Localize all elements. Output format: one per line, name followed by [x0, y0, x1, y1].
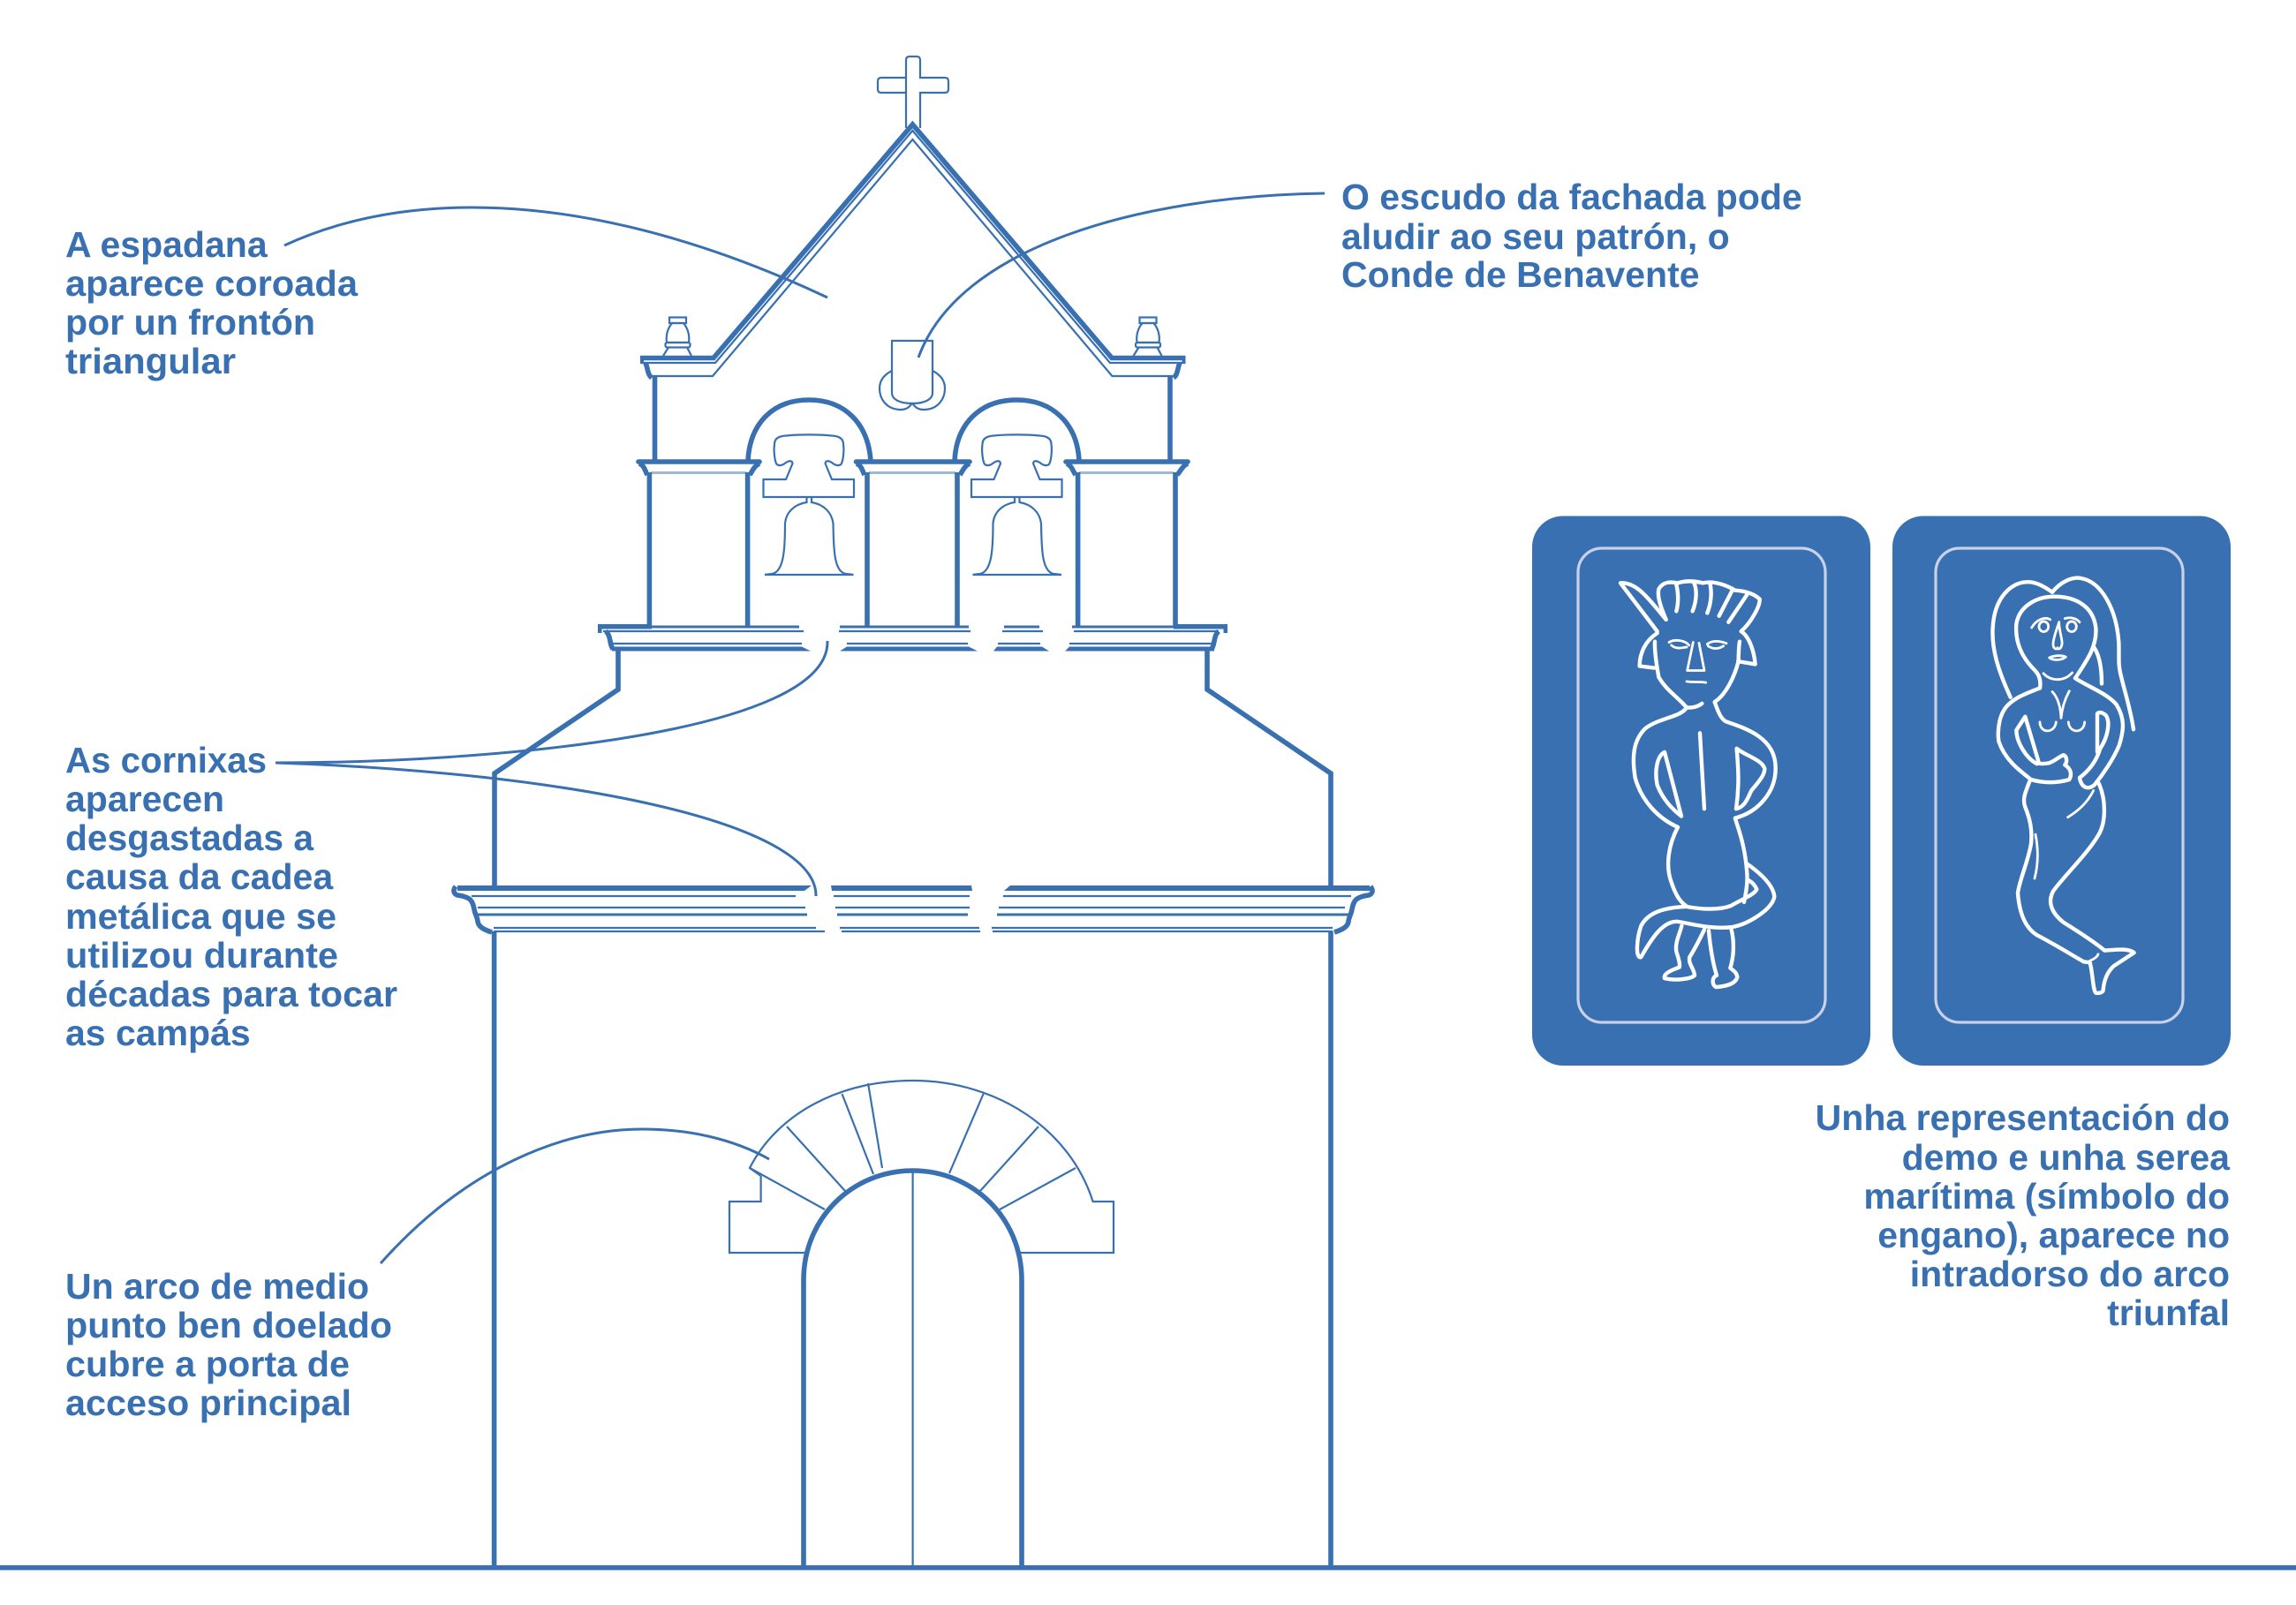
- text: carvings caption: [1816, 1097, 2231, 1333]
- text: gable annotation: A espadana: [65, 224, 268, 265]
- main worn cornice: [454, 885, 1372, 932]
- ground line: [0, 1565, 2296, 1570]
- text: coat of arms annotation: aludir ao seu patrón, o: [1341, 216, 1730, 257]
- text: coat of arms annotation: Conde de Benavente: [1341, 254, 1700, 295]
- icon: left finial urn: [663, 318, 691, 356]
- text: coat of arms annotation: O escudo da fachada pode: [1341, 177, 1802, 217]
- text: gable annotation: [65, 224, 359, 381]
- text: door arch annotation: Un arco de medio: [65, 1266, 369, 1307]
- text: cornice annotation: As cornixas: [65, 740, 267, 780]
- triangular pediment: [640, 124, 1185, 378]
- icon: mermaid figure: [1992, 578, 2134, 993]
- icon: right finial urn: [1134, 318, 1162, 356]
- text: carvings caption: marítima (símbolo do: [1863, 1176, 2230, 1217]
- icon: coat of arms shield: [880, 341, 945, 410]
- text: carvings caption: Unha representación do: [1816, 1097, 2230, 1138]
- pilaster capitals: [638, 462, 1188, 475]
- text: cornice annotation: as campás: [65, 1013, 251, 1053]
- voussoirs of the semicircular arch: [729, 1081, 1114, 1253]
- belfry pilasters: [649, 472, 1175, 626]
- text: gable annotation: aparece coroada: [65, 263, 359, 304]
- upper worn cornice: [598, 624, 1227, 652]
- text: cornice annotation: aparecen: [65, 779, 224, 819]
- text: gable annotation: triangular: [65, 341, 236, 381]
- text: cornice annotation: [65, 740, 397, 1053]
- text: carvings caption: intradorso do arco: [1910, 1254, 2230, 1294]
- main door arch: [804, 1171, 1022, 1568]
- text: carvings caption: demo e unha serea: [1902, 1137, 2231, 1178]
- callout line: coat of arms: [918, 193, 1325, 358]
- text: door arch annotation: cubre a porta de: [65, 1344, 350, 1384]
- icon: demon figure: [1620, 581, 1776, 987]
- text: carvings caption: engano), aparece no: [1877, 1215, 2230, 1255]
- tower shoulders and upper walls: [495, 651, 1331, 887]
- callout line: door arch: [381, 1129, 769, 1263]
- text: carvings caption: triunfal: [2107, 1292, 2230, 1333]
- panel: demon carving: [1532, 516, 1870, 1066]
- text: cornice annotation: desgastadas a: [65, 818, 314, 858]
- text: gable annotation: por un frontón: [65, 302, 315, 343]
- icon: right bell: [971, 434, 1061, 575]
- panel: mermaid carving: [1892, 516, 2231, 1066]
- icon: left bell: [763, 434, 854, 575]
- text: cornice annotation: causa da cadea: [65, 856, 334, 897]
- belfry walls and bell arches: [655, 377, 1170, 461]
- callout line: gable: [284, 207, 827, 298]
- text: coat of arms annotation: [1341, 177, 1802, 295]
- text: cornice annotation: utilizou durante: [65, 935, 338, 976]
- text: cornice annotation: metálica que se: [65, 896, 336, 937]
- callout line: upper cornice: [276, 641, 827, 763]
- text: door arch annotation: punto ben doelado: [65, 1305, 392, 1345]
- lower tower walls: [495, 931, 1331, 1568]
- text: cornice annotation: décadas para tocar: [65, 974, 397, 1014]
- text: door arch annotation: acceso principal: [65, 1383, 351, 1423]
- icon: cross on top of the gable: [878, 57, 948, 128]
- callout line: main cornice: [276, 763, 816, 896]
- text: door arch annotation: [65, 1266, 392, 1423]
